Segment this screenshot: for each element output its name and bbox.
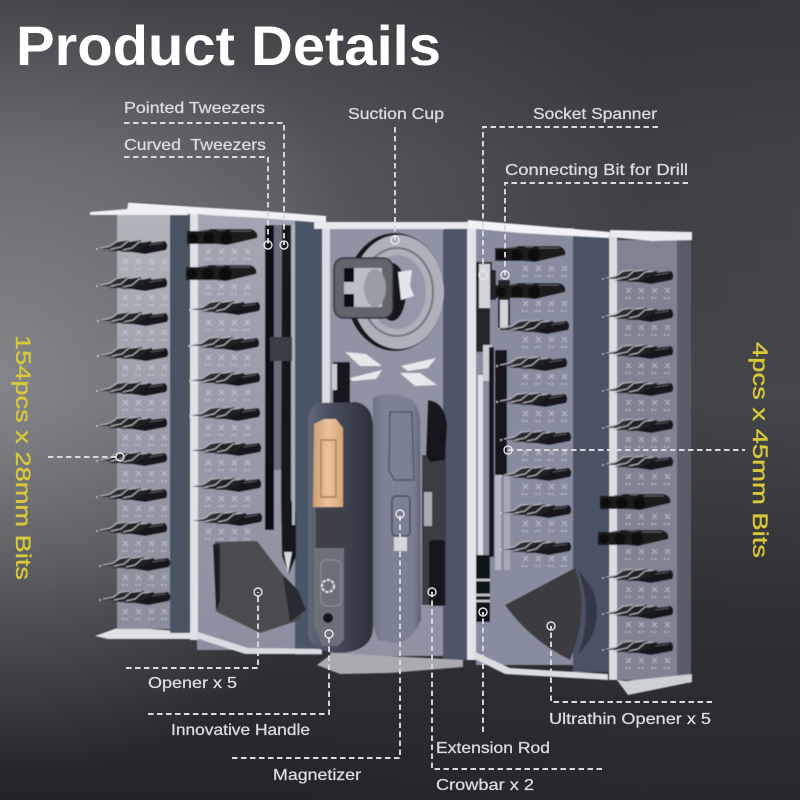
panel: centre [308,222,468,674]
logo marks [345,352,437,386]
vertical label: 45mm bits: 4pcs x 45mm Bits [748,342,771,558]
title: Product Details [16,14,441,77]
label: crowbar: Crowbar x 2 [436,777,534,794]
opener [215,541,303,633]
label: extension rod: Extension Rod [436,740,550,757]
panel: left bits and tweezers [128,203,326,655]
bit rows [186,229,262,526]
panel: far right 45mm bits [598,230,692,695]
floor tray [317,653,463,674]
bit rows right [598,270,673,655]
sockets and rods [476,262,510,622]
vertical label: 28mm bits: 154pcs x 28mm Bits [11,335,34,580]
label: connecting bit: Connecting Bit for Drill [505,162,688,179]
bit rows [495,246,571,555]
label: magnetizer: Magnetizer [273,767,362,784]
label: socket spanner: Socket Spanner [533,106,658,123]
innovative handle [308,362,373,653]
leader lines [48,123,745,769]
suction cup [334,233,444,351]
magnetizer [373,394,421,643]
label: pointed tweezers: Pointed Tweezers [124,100,265,117]
label: suction cup: Suction Cup [348,106,444,123]
crowbar [422,400,447,606]
bit rows left [96,240,170,605]
tweezers [265,225,296,574]
label: ultrathin opener: Ultrathin Opener x 5 [549,711,711,728]
label: innovative handle: Innovative Handle [171,722,310,739]
label: opener: Opener x 5 [148,675,237,692]
label: curved tweezers: Curved Tweezers [124,137,266,154]
ultrathin opener [505,568,581,660]
panel: far left 28mm bits [90,203,192,639]
panel: right bits and rod [467,220,610,680]
